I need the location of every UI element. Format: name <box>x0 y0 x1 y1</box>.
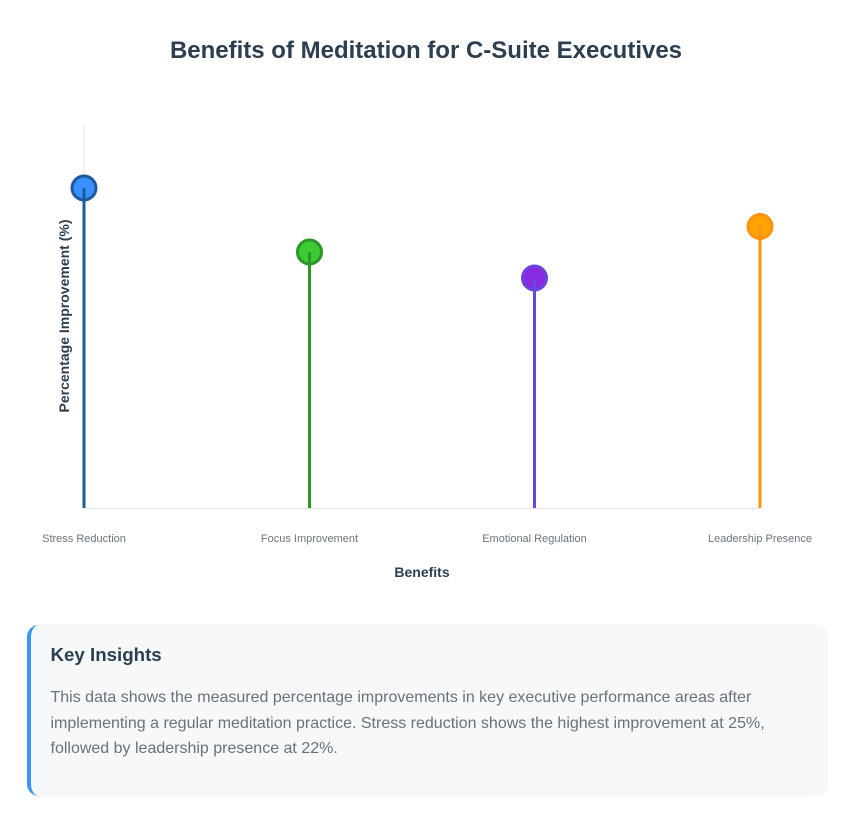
lollipop: Emotional Regulation <box>522 266 546 508</box>
insights text: This data shows the measured percentage improvements in key executive performance areas after <box>50 689 751 706</box>
x-axis category labels: Focus Improvement <box>261 533 358 545</box>
insights heading: Key Insights <box>50 644 162 665</box>
x-axis category labels <box>42 533 812 545</box>
lollipop: Leadership Presence <box>748 214 772 508</box>
lollipop: Stress Reduction <box>72 176 96 508</box>
panel: key insights <box>27 625 827 796</box>
x-axis category labels: Leadership Presence <box>708 533 812 545</box>
x-axis title: Benefits <box>394 564 450 580</box>
lollipop chart <box>42 124 812 580</box>
lollipop: Focus Improvement <box>298 240 322 508</box>
x-axis category labels: Stress Reduction <box>42 533 126 545</box>
x-axis category labels: Emotional Regulation <box>482 533 587 545</box>
insights text <box>50 689 765 757</box>
y-axis title: Percentage Improvement (%) <box>56 220 72 412</box>
insights text: implementing a regular meditation practice. Stress reduction shows the highest improvement at 25%, <box>50 715 765 732</box>
title: Benefits of Meditation for C-Suite Executives <box>170 37 682 64</box>
insights text: followed by leadership presence at 22%. <box>50 740 338 757</box>
